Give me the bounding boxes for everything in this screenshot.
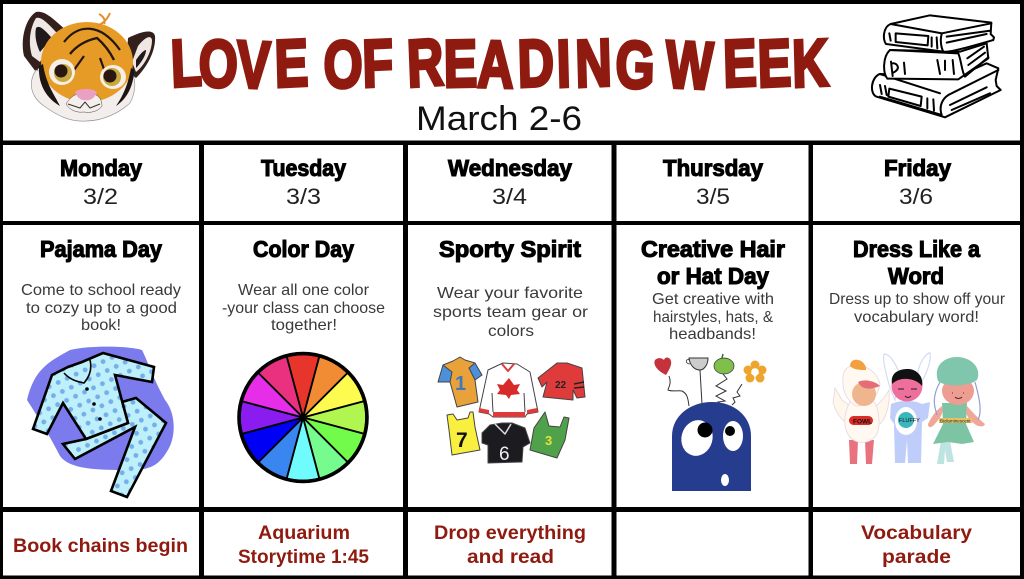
figure: jellyfish costume — [928, 357, 985, 464]
panel: Wednesday event: and read — [467, 547, 554, 568]
panel: Wednesday event: Drop everything — [434, 523, 586, 544]
panel: Tuesday event — [204, 512, 403, 576]
panel: Tuesday header — [204, 145, 403, 221]
icon: sports jerseys: 7 — [456, 429, 468, 452]
illustration: children in word costumes — [833, 353, 985, 464]
panel: Pajama Day: Pajama Day — [40, 236, 162, 262]
panel: Sporty Spirit: Wear your favorite — [437, 285, 583, 302]
panel: Monday event: Book chains begin — [13, 536, 188, 557]
panel: Wednesday header: 3/4 — [492, 184, 527, 209]
panel: Pajama Day — [3, 225, 199, 507]
figure: bunny costume — [884, 353, 930, 463]
panel: Tuesday event: Storytime 1:45 — [238, 547, 369, 568]
panel: Dress Like a Word: vocabulary word! — [854, 309, 979, 326]
panel: Wednesday header — [408, 145, 612, 221]
panel: Tuesday header: Tuesday — [261, 155, 346, 181]
panel: Friday header: 3/6 — [899, 184, 933, 209]
panel: Friday event: Vocabulary — [861, 523, 972, 544]
panel: Friday event — [813, 512, 1020, 576]
panel: Sporty Spirit: Sporty Spirit — [439, 236, 581, 262]
panel: Pajama Day: to cozy up to a good — [26, 300, 177, 317]
panel: Color Day — [204, 225, 403, 507]
panel: Creative Hair or Hat Day: hairstyles, hats, & — [653, 309, 773, 326]
panel: Thursday header: Thursday — [663, 155, 763, 181]
panel: Monday header — [3, 145, 199, 221]
icon: sports jerseys: 22 — [555, 380, 567, 391]
panel: Sporty Spirit: colors — [488, 323, 534, 340]
panel: Dress Like a Word: Word — [888, 263, 944, 289]
panel: Pajama Day: Come to school ready — [21, 282, 181, 299]
icon: sports jerseys — [438, 357, 585, 465]
panel: Dress Like a Word: Dress Like a — [853, 236, 980, 262]
panel: Color Day: -your class can choose — [222, 300, 385, 317]
panel: Color Day: Wear all one color — [238, 282, 370, 299]
figure: chicken costume: FOWL — [853, 418, 872, 426]
icon: sports jerseys: 6 — [499, 444, 510, 465]
panel: Sporty Spirit — [408, 225, 612, 507]
panel: Color Day: together! — [271, 317, 337, 334]
panel: Thursday event (empty) — [616, 512, 808, 576]
panel: Tuesday header: 3/3 — [286, 184, 321, 209]
figure: jellyfish costume: Bioluminescent — [940, 418, 971, 424]
icon: pajamas — [27, 347, 174, 497]
icon: color wheel — [239, 354, 367, 482]
panel: title banner — [3, 4, 1020, 140]
icon: blue monster with hair accessories — [654, 354, 766, 491]
date subtitle: March 2-6 — [416, 100, 582, 138]
icon: tiger head — [23, 12, 155, 121]
panel: Monday header: 3/2 — [83, 184, 118, 209]
panel: Wednesday header: Wednesday — [448, 155, 572, 181]
panel: Color Day: Color Day — [253, 236, 354, 262]
panel: Pajama Day: book! — [81, 317, 121, 334]
panel: Thursday header: 3/5 — [696, 184, 730, 209]
panel: Dress Like a Word — [813, 225, 1020, 507]
icon: sports jerseys: 1 — [455, 373, 466, 395]
panel: Monday event — [3, 512, 199, 576]
panel: Tuesday event: Aquarium — [258, 523, 350, 544]
panel: Thursday header — [616, 145, 808, 221]
figure: bunny costume: FLUFFY — [899, 418, 920, 424]
panel: Dress Like a Word: Dress up to show off your — [829, 291, 1006, 308]
panel: Friday header: Friday — [884, 155, 951, 181]
panel: Friday event: parade — [882, 547, 951, 568]
title: LOVE OF READING WEEK — [169, 23, 830, 104]
panel: Creative Hair or Hat Day — [616, 225, 808, 507]
panel: Creative Hair or Hat Day: or Hat Day — [657, 263, 769, 289]
panel: Creative Hair or Hat Day: Get creative with — [652, 291, 774, 308]
panel: Creative Hair or Hat Day: headbands! — [669, 326, 756, 343]
figure: chicken costume — [833, 360, 889, 464]
panel: Monday header: Monday — [60, 155, 142, 181]
panel: Wednesday event — [408, 512, 612, 576]
panel: Sporty Spirit: sports team gear or — [433, 304, 589, 321]
icon: stack of books — [872, 15, 1001, 117]
panel: Friday header — [813, 145, 1020, 221]
panel: Creative Hair or Hat Day: Creative Hair — [641, 236, 785, 262]
icon: sports jerseys: 3 — [545, 433, 552, 448]
